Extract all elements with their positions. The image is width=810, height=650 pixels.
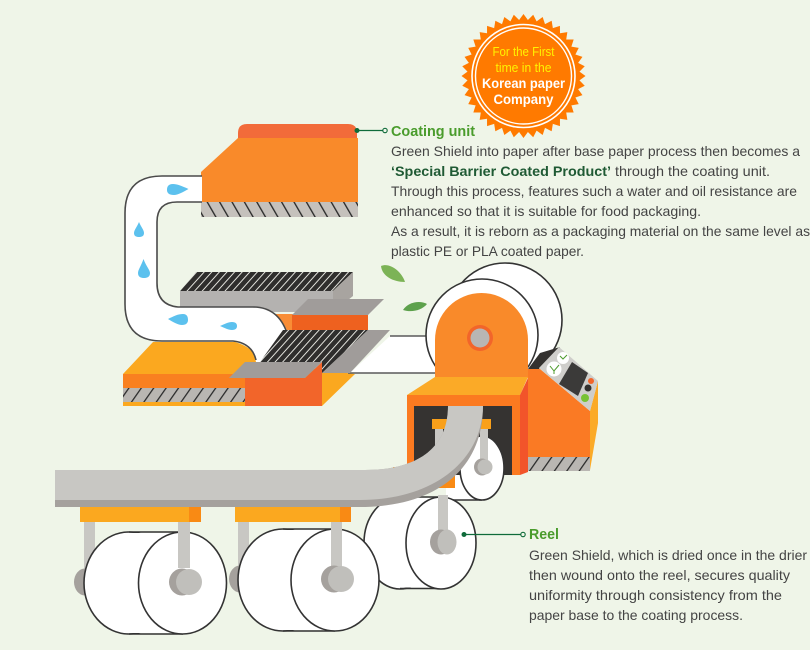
machine base	[407, 377, 528, 475]
lower striped press	[229, 330, 390, 406]
badge: first in Korean paper company: For the First	[492, 44, 555, 59]
icon: water drop	[168, 314, 188, 325]
bottom reel 1	[74, 507, 226, 634]
coating unit machine head	[201, 124, 358, 217]
text: coating unit	[391, 124, 810, 259]
icon: gauge	[546, 362, 562, 376]
curved grey conveyor	[55, 406, 483, 507]
text: reel: uniformity through consistency from the	[529, 587, 782, 603]
text: reel	[529, 527, 807, 623]
leaves	[381, 265, 427, 311]
icon: leaf	[403, 302, 427, 311]
icon: water drop	[167, 184, 188, 195]
text: reel: then wound onto the reel, secures quality	[529, 567, 790, 583]
paper rolls behind head	[426, 263, 562, 391]
paper belt with water drops	[125, 176, 288, 362]
text: coating unit: Coating unit	[391, 124, 475, 140]
buttons	[581, 378, 594, 402]
icon: water drop	[138, 259, 150, 278]
text: coating unit: enhanced so that it is suitable for food packaging.	[391, 203, 701, 219]
connector: reel	[462, 532, 525, 537]
text: reel: Reel	[529, 527, 559, 543]
text: coating unit: As a result, it is reborn as a packaging material on the same level as	[391, 223, 810, 239]
badge: first in Korean paper company: Company	[494, 92, 554, 107]
badge: first in Korean paper company: Korean paper	[482, 76, 566, 91]
icon: gauge	[557, 352, 569, 364]
right paper belt	[348, 336, 440, 373]
upper striped press	[180, 272, 353, 312]
text: coating unit: Green Shield into paper after base paper process then becomes a	[391, 143, 800, 159]
upper press block	[292, 299, 384, 330]
badge: first in Korean paper company	[462, 14, 586, 138]
large reel	[364, 495, 476, 589]
text: coating unit: ‘Special Barrier Coated Product’	[391, 163, 611, 179]
icon: leaf	[381, 265, 405, 282]
text: reel: Green Shield, which is dried once in the drier	[529, 547, 807, 563]
control machine	[528, 347, 598, 471]
text: coating unit: Through this process, features such a water and oil resistance are	[391, 183, 797, 199]
badge: first in Korean paper company: time in the	[496, 60, 552, 75]
small reel	[393, 419, 504, 500]
text: coating unit: plastic PE or PLA coated paper.	[391, 243, 584, 259]
lower platform	[123, 342, 355, 406]
text: coating unit: through the coating unit.	[615, 163, 770, 179]
text: reel: paper base to the coating process.	[529, 607, 743, 623]
icon: water drop	[220, 322, 237, 330]
machine head with ring	[435, 293, 528, 378]
screen	[559, 362, 588, 396]
icon: water drop	[134, 222, 144, 237]
bottom reel 2	[229, 507, 379, 631]
orange wedge behind press	[273, 314, 293, 333]
connector: coating unit	[354, 128, 387, 133]
